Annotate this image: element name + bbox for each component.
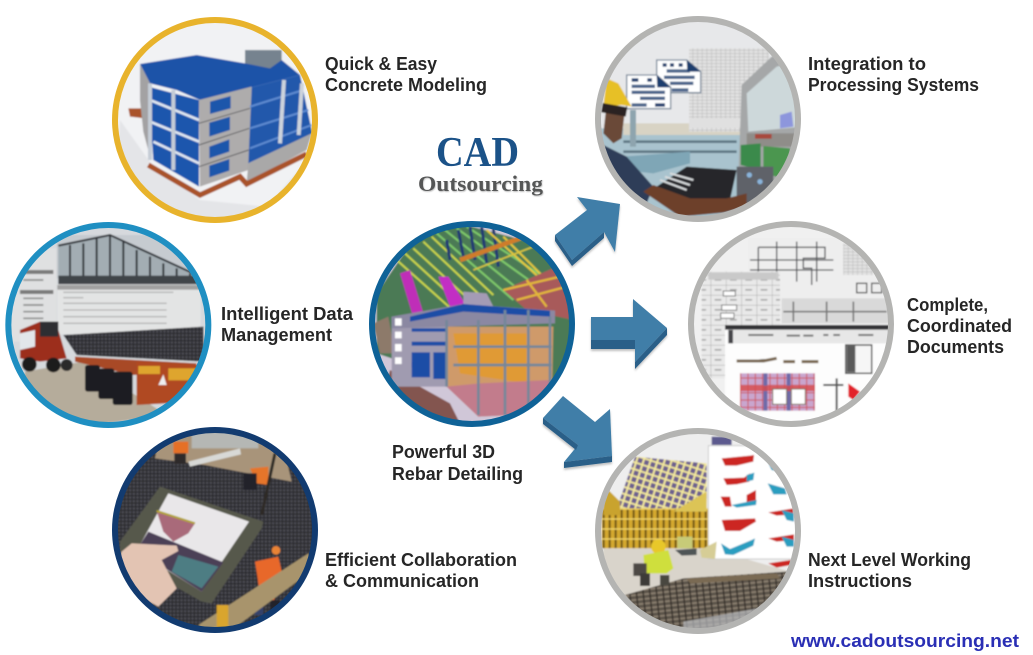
label: next level working instructions [808,550,971,591]
label: quick and easy concrete modeling [325,54,487,95]
label: powerful 3D rebar detailing: Powerful 3D [392,442,495,462]
label: complete coordinated documents: Documents [907,337,1004,357]
panel: quick and easy concrete modeling photo [112,17,318,223]
label: quick and easy concrete modeling: Quick & Easy [325,54,437,74]
label: complete coordinated documents [907,295,1012,357]
label: efficient collaboration and communication [325,550,517,591]
label: complete coordinated documents: Coordinated [907,316,1012,336]
arrow: to documents [591,299,667,369]
label: powerful 3D rebar detailing: Rebar Detailing [392,464,523,484]
panel: next level working instructions photo [590,425,810,638]
label: intelligent data management: Management [221,325,332,345]
label: integration to processing systems: Processing Systems [808,75,979,95]
website url: www.cadoutsourcing.net [790,631,1019,651]
label: efficient collaboration and communication: & Communication [325,571,479,591]
panel: intelligent data management photo [5,222,212,428]
label: integration to processing systems: Integration to [808,54,926,74]
label: complete coordinated documents: Complete, [907,295,988,315]
panel: complete coordinated documents photo [688,221,894,427]
label: quick and easy concrete modeling: Concrete Modeling [325,75,487,95]
label: intelligent data management: Intelligent Data [221,304,354,324]
title: CAD Outsourcing [418,130,543,196]
label: next level working instructions: Next Level Working [808,550,971,570]
panel: powerful 3D rebar detailing photo [369,221,575,427]
subheading: Outsourcing: Outsourcing [418,171,543,196]
label: efficient collaboration and communication: Efficient Collaboration [325,550,517,570]
arrow: to integration [555,197,620,266]
label: powerful 3D rebar detailing [392,442,523,484]
panel: integration to processing systems photo [590,10,810,223]
label: integration to processing systems [808,54,979,95]
panel: efficient collaboration photo [112,427,318,633]
label: next level working instructions: Instructions [808,571,912,591]
label: intelligent data management [221,304,354,345]
heading: CAD: CAD [436,130,519,176]
arrow: to instructions [543,396,612,468]
